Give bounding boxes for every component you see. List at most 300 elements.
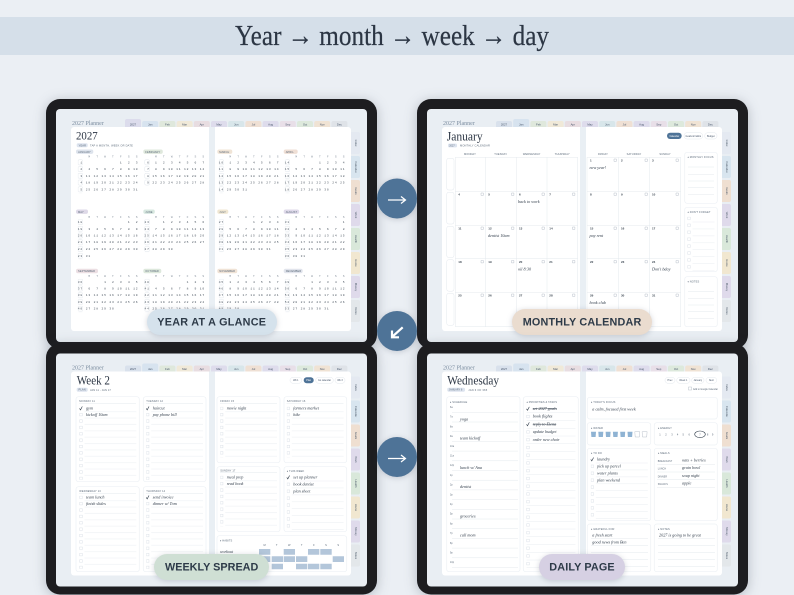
calendar grid: Don't bday — [651, 266, 671, 272]
month subtitle: MONTHLY CALENDAR — [460, 143, 490, 147]
today's focus — [587, 397, 717, 419]
day nav buttons: Next — [709, 379, 714, 382]
grateful for: good news from Ben — [592, 540, 626, 544]
month: October: 42 11 12 13 14 15 16 17 — [144, 294, 205, 297]
month: December: 53 27 28 29 30 31 — [285, 308, 330, 311]
energy scale: 9 — [712, 432, 714, 436]
panel: tablet year at a glance: Jul — [252, 122, 256, 126]
month: January: JANUARY — [78, 150, 91, 154]
day: Friday: movie night — [227, 406, 247, 410]
week nav buttons: Go calendar — [318, 379, 331, 382]
panel: tablet year at a glance: Goals — [354, 187, 358, 195]
month: July — [217, 210, 279, 253]
today's focus: ♦ TODAY'S FOCUS — [591, 400, 616, 404]
month: August: 36 30 31 — [285, 255, 306, 258]
schedule: 10a — [450, 446, 455, 448]
panel: tablet monthly calendar: Jun — [605, 122, 610, 126]
day nav buttons: Week 1 — [679, 379, 688, 382]
to do list: ♦ TO DO — [591, 451, 602, 455]
panel: tablet daily page: Home — [725, 504, 729, 512]
schedule: team kickoff — [460, 436, 481, 441]
day: Wednesday: WEDNESDAY 13 — [79, 489, 101, 493]
schedule: 7p — [450, 533, 453, 535]
schedule — [447, 397, 520, 572]
month subtitle: 2027 — [449, 145, 455, 147]
day: Saturday: farmers market — [293, 406, 320, 410]
day: Friday — [217, 397, 280, 463]
day: Monday: MONDAY 11 — [79, 399, 95, 403]
panel: tablet year at a glance: Nov — [320, 122, 325, 126]
month: September: M T W T F S S — [78, 275, 138, 278]
panel: tablet daily page: Goals — [725, 432, 729, 440]
this week list: book dentist — [293, 481, 314, 486]
month: December: 49 1 2 3 4 5 — [285, 281, 345, 284]
panel: tablet daily page: Jul — [623, 367, 627, 371]
view buttons — [667, 133, 717, 139]
sidebar: don't forget — [685, 207, 717, 272]
month: July: 28 5 6 7 8 9 10 11 — [219, 228, 279, 231]
meals: LUNCH — [658, 469, 666, 471]
panel: tablet monthly calendar: Money — [725, 283, 729, 292]
panel: tablet daily page: Dec — [708, 367, 713, 371]
sidebar: notes — [685, 277, 717, 327]
panel: tablet year at a glance: Work — [354, 212, 358, 219]
panel: tablet monthly calendar — [417, 99, 748, 349]
month: August: 34 16 17 18 19 20 21 22 — [285, 241, 345, 244]
weekday headers: TUESDAY — [494, 152, 507, 156]
panel: tablet daily page: Calendar — [725, 406, 729, 417]
energy scale: ♦ ENERGY — [658, 426, 672, 430]
schedule: lunch w/ Ana — [460, 465, 482, 470]
month: October: 41 4 5 6 7 8 9 10 — [144, 288, 205, 290]
panel: tablet weekly spread: Goals — [354, 432, 358, 440]
month: September: 37 6 7 8 9 10 11 12 — [78, 288, 138, 290]
calendar grid: 25 — [458, 294, 462, 298]
energy scale: 6 — [689, 432, 691, 436]
panel: tablet weekly spread: Work — [354, 456, 358, 463]
month: June: 24 7 8 9 10 11 12 13 — [144, 228, 205, 231]
panel: tablet weekly spread: 2027 Planner — [72, 366, 104, 372]
day: Tuesday — [143, 397, 206, 482]
panel: tablet year at a glance: Sep — [285, 122, 291, 126]
panel: tablet daily page: 2027 Planner — [443, 366, 475, 372]
panel: tablet weekly spread: Home — [354, 504, 358, 512]
panel: tablet weekly spread: Apr — [200, 367, 204, 371]
panel: tablet weekly spread: Jul — [252, 367, 256, 371]
day: Wednesday: team lunch — [86, 494, 104, 500]
panel: tablet daily page: 2027 — [501, 367, 508, 371]
calendar grid: 26 — [488, 294, 492, 298]
month: April: 16 12 13 14 15 16 17 18 — [285, 175, 345, 178]
sidebar: monthly focus — [685, 152, 717, 203]
meals: SNACKS — [658, 483, 668, 486]
month: November: NOVEMBER — [219, 269, 235, 273]
week nav buttons — [290, 377, 345, 383]
panel: tablet year at a glance: Index — [354, 140, 358, 147]
schedule: call mom — [460, 532, 475, 537]
google calendar link — [688, 387, 718, 391]
energy scale: 7 — [699, 432, 701, 436]
month: May: MAY — [78, 210, 84, 214]
calendar grid: 21 — [549, 260, 553, 264]
calendar grid: 2 — [621, 158, 623, 162]
panel: tablet monthly calendar: Sep — [656, 122, 662, 126]
month: January: 2 4 5 6 7 8 9 10 — [78, 168, 138, 171]
calendar grid: 22 — [590, 260, 594, 264]
panel: tablet monthly calendar: 2027 Planner — [443, 121, 475, 127]
panel: tablet weekly spread: Nov — [320, 367, 325, 371]
month: August — [284, 210, 345, 260]
calendar grid: 1 — [590, 158, 592, 162]
week subtitle — [77, 388, 111, 392]
day: Sunday: read book — [227, 481, 244, 486]
panel: tablet daily page: Work — [725, 456, 729, 463]
month: February: M T W T F S S — [144, 155, 205, 158]
schedule: groceries — [460, 513, 476, 518]
panel: tablet daily page: Mar — [553, 367, 558, 371]
meals: BREAKFAST — [658, 460, 673, 463]
water tracker — [587, 423, 651, 445]
day: Saturday — [284, 397, 347, 463]
label pill: daily page — [539, 554, 625, 580]
month: March: 14 29 30 31 — [219, 188, 248, 191]
weekday headers: FRIDAY — [598, 152, 608, 156]
month: June: M T W T F S S — [144, 216, 205, 219]
panel: tablet year at a glance: Feb — [165, 122, 170, 126]
month: September: 40 27 28 29 30 — [78, 308, 115, 311]
month: February — [143, 150, 205, 186]
month: December: 50 6 7 8 9 10 11 12 — [285, 288, 345, 290]
month: March: 12 15 16 17 18 19 20 21 — [219, 175, 279, 178]
schedule: 7a — [450, 417, 453, 419]
panel: tablet weekly spread: Mar — [182, 367, 187, 371]
month: September — [76, 269, 138, 313]
panel: tablet daily page: Index — [725, 384, 729, 392]
arrow: month to week — [377, 311, 417, 351]
meals: DINNER — [658, 476, 667, 478]
panel: tablet weekly spread: Jun — [234, 367, 239, 371]
panel: tablet daily page: May — [587, 367, 593, 371]
calendar grid: 3 — [652, 158, 654, 162]
panel: tablet monthly calendar: Notes — [725, 307, 729, 315]
priorities and tasks — [523, 397, 578, 572]
priorities and tasks: order new chair — [533, 437, 560, 442]
panel: tablet monthly calendar: Calendar — [725, 161, 729, 173]
month: September: 36 1 2 3 4 5 — [78, 281, 138, 284]
week nav buttons: Plan — [306, 379, 312, 382]
this week list: plan sheet — [292, 488, 311, 493]
panel: tablet year at a glance: Money — [354, 283, 358, 292]
panel: tablet monthly calendar: Jul — [623, 122, 627, 126]
panel: tablet daily page: Oct — [674, 367, 678, 371]
month: April: 17 19 20 21 22 23 24 25 — [285, 182, 345, 185]
month: November: 48 22 23 24 25 26 27 28 — [219, 301, 279, 304]
year subtitle: YEAR — [79, 143, 86, 147]
to do list: laundry — [597, 456, 610, 462]
panel: tablet daily page: Health — [725, 479, 729, 488]
schedule: 4p — [450, 504, 453, 506]
meals: grain bowl — [682, 465, 701, 470]
month: February: 7 8 9 10 11 12 13 14 — [144, 168, 205, 171]
heading: January: January — [447, 128, 483, 143]
habits tracker: T — [301, 543, 303, 547]
calendar grid: 19 — [488, 260, 492, 264]
calendar grid: 15 — [590, 226, 594, 230]
month: March: 10 1 2 3 4 5 6 7 — [219, 161, 279, 164]
month: March: MARCH — [219, 150, 229, 154]
calendar grid: dentist 10am — [488, 233, 510, 238]
calendar grid: 11 — [458, 226, 462, 230]
panel: tablet weekly spread: 2027 — [130, 367, 137, 371]
to do list — [587, 448, 651, 521]
notes: 2027 is going to be great — [659, 532, 702, 538]
energy scale: 1 — [659, 432, 661, 436]
panel: tablet year at a glance: Calendar — [354, 161, 358, 173]
day: Thursday: send invoice — [153, 494, 174, 500]
month: April: 15 5 6 7 8 9 10 11 — [285, 168, 345, 171]
day: Sunday — [217, 467, 280, 532]
year subtitle: TAP A MONTH, WEEK OR DATE — [90, 143, 133, 147]
month: August: M T W T F S S — [285, 216, 345, 219]
month: May: 22 24 25 26 27 28 29 30 — [78, 248, 138, 251]
panel: tablet monthly calendar: Feb — [536, 122, 541, 126]
month: May: 23 31 — [78, 255, 91, 258]
day: Friday: FRIDAY 15 — [220, 399, 235, 403]
calendar grid: 27 — [519, 294, 523, 298]
title banner: Year → month → week → day — [235, 20, 549, 52]
week nav buttons: Wk 3 — [337, 379, 343, 382]
month: April: 14 1 2 3 4 — [285, 161, 345, 164]
google calendar link: Add to Google Calendar — [693, 388, 718, 391]
month: October: 40 1 2 3 — [144, 281, 205, 284]
priorities and tasks: update budget — [533, 429, 557, 434]
day: Saturday: hike — [293, 412, 300, 417]
month: December: M T W T F S S — [285, 275, 345, 278]
habits tracker: F — [313, 543, 315, 547]
month: November — [217, 269, 279, 313]
month: March: M T W T F S S — [219, 155, 279, 158]
panel: tablet weekly spread: Jan — [148, 367, 153, 371]
panel: tablet year at a glance: Oct — [303, 122, 307, 126]
panel: tablet year at a glance — [46, 99, 377, 349]
month: December: DECEMBER — [286, 269, 301, 273]
calendar grid: 7 — [549, 192, 551, 196]
calendar grid: 30 — [621, 294, 625, 298]
month: January: 4 18 19 20 21 22 23 24 — [78, 182, 138, 185]
notes — [654, 524, 717, 572]
meals — [654, 448, 717, 521]
priorities and tasks: set 2027 goals — [533, 406, 557, 411]
panel: tablet year at a glance: Apr — [200, 122, 204, 126]
arrow: week to day — [377, 437, 417, 477]
calendar grid: 20 — [519, 260, 523, 264]
month: May: 21 17 18 19 20 21 22 23 — [78, 241, 138, 244]
calendar grid: book club — [590, 300, 606, 305]
panel: tablet daily page: Apr — [571, 367, 575, 371]
month: February: FEBRUARY — [145, 150, 160, 154]
day: Thursday: THURSDAY 14 — [146, 489, 166, 493]
month: October — [143, 269, 205, 313]
energy scale: 5 — [683, 432, 685, 436]
day: Tuesday: pay phone bill — [152, 412, 177, 417]
month: November: 46 8 9 10 11 12 13 14 — [219, 288, 279, 290]
calendar grid: 12 — [488, 226, 492, 230]
calendar grid: 13 — [519, 226, 523, 230]
calendar grid: 5 — [488, 192, 490, 196]
day subtitle: JAN 6 OF 365 — [468, 388, 488, 392]
week subtitle: PLAN — [78, 388, 86, 392]
to do list: plan weekend — [596, 477, 621, 482]
sidebar: don't forget: ♦ DON'T FORGET — [688, 210, 711, 214]
month: June: JUNE — [145, 210, 153, 214]
panel: tablet daily page: Notes — [725, 552, 729, 560]
month: October: 43 18 19 20 21 22 23 24 — [144, 301, 205, 304]
notes: ♦ NOTES — [658, 527, 670, 531]
panel: tablet daily page: Money — [725, 527, 729, 536]
schedule: 5p — [450, 514, 453, 516]
label pill: year at a glance — [147, 309, 277, 335]
day: Monday: gym — [86, 406, 93, 410]
panel: tablet monthly calendar: Jan — [519, 122, 524, 126]
month: February: 9 22 23 24 25 26 27 28 — [144, 182, 205, 185]
panel: tablet daily page — [417, 344, 748, 594]
panel: tablet daily page: Aug — [639, 367, 645, 371]
panel: tablet year at a glance: Aug — [268, 122, 274, 126]
month: August: AUGUST — [286, 210, 298, 214]
panel: tablet year at a glance: Health — [354, 235, 358, 243]
calendar grid: new year! — [590, 165, 607, 170]
panel: tablet daily page: Nov — [691, 367, 696, 371]
schedule: 8a — [450, 426, 453, 428]
panel: tablet monthly calendar: Oct — [674, 122, 678, 126]
schedule: ♦ SCHEDULE — [450, 400, 468, 404]
month: August: 33 9 10 11 12 13 14 15 — [285, 234, 345, 238]
calendar grid: 9 — [621, 192, 623, 196]
panel: tablet monthly calendar: Health — [725, 235, 729, 243]
to do list: pick up parcel — [596, 463, 622, 468]
label pill: monthly calendar — [512, 309, 652, 335]
month: January: M T W T F S S — [78, 155, 138, 158]
month: December: 52 20 21 22 23 24 25 26 — [285, 301, 345, 304]
year subtitle — [77, 143, 133, 147]
heading: 2027: 2027 — [76, 128, 98, 142]
month: June: 25 14 15 16 17 18 19 20 — [144, 234, 205, 238]
this week list — [284, 467, 347, 532]
schedule: 3p — [450, 494, 453, 496]
priorities and tasks: ♦ PRIORITIES & TASKS — [526, 400, 557, 404]
panel: tablet weekly spread: Aug — [268, 367, 274, 371]
heading: Week 2: Week 2 — [77, 372, 110, 387]
month: May: 19 3 4 5 6 7 8 9 — [78, 228, 138, 231]
panel: tablet monthly calendar: Mar — [553, 122, 558, 126]
meals: soup night — [682, 473, 700, 478]
panel: tablet weekly spread: Health — [354, 479, 358, 488]
sidebar: notes: ♦ NOTES — [688, 280, 699, 284]
day: Wednesday — [76, 487, 139, 572]
panel: tablet monthly calendar: May — [587, 122, 593, 126]
panel: tablet weekly spread: Oct — [303, 367, 307, 371]
meals: ♦ MEALS — [658, 451, 670, 455]
panel: tablet year at a glance: May — [216, 122, 222, 126]
month: February: 6 1 2 3 4 5 6 7 — [144, 161, 205, 164]
calendar grid: 16 — [621, 226, 625, 230]
month: March: 11 8 9 10 11 12 13 14 — [219, 168, 279, 171]
day subtitle: JANUARY 6 — [449, 389, 463, 392]
month: July: 31 26 27 28 29 30 31 — [219, 248, 271, 251]
month: June: 23 1 2 3 4 5 6 — [144, 221, 205, 224]
day nav buttons: January — [694, 379, 703, 382]
to do list: water plants — [597, 470, 618, 475]
week subtitle: JAN 11 - JAN 17 — [90, 388, 111, 392]
month: January — [76, 150, 138, 193]
schedule: 10p — [450, 562, 455, 564]
calendar grid: 17 — [652, 226, 656, 230]
habits tracker: workout — [220, 549, 234, 554]
calendar grid: 18 — [458, 260, 462, 264]
panel: tablet weekly spread: Notes — [354, 552, 358, 560]
day: Thursday: dinner w/ Tom — [153, 501, 177, 506]
month: January: 1 1 2 3 — [78, 161, 138, 164]
day: Tuesday: TUESDAY 12 — [146, 399, 164, 403]
day subtitle — [447, 388, 488, 392]
calendar grid: pay rent — [588, 233, 604, 238]
grateful for: ♦ GRATEFUL FOR — [591, 527, 614, 531]
weekday headers: MONDAY — [464, 152, 476, 156]
calendar grid: 8 — [590, 192, 592, 196]
panel: tablet monthly calendar: Dec — [708, 122, 713, 126]
month: September: 39 20 21 22 23 24 25 26 — [78, 301, 138, 304]
energy scale: 3 — [671, 432, 673, 436]
calendar grid: back to work — [518, 199, 540, 204]
panel: tablet year at a glance: 2027 — [130, 122, 137, 126]
month: November: 45 1 2 3 4 5 6 7 — [219, 281, 279, 284]
day: Sunday: meal prep — [227, 474, 243, 480]
month: August: 35 23 24 25 26 27 28 29 — [285, 248, 345, 251]
schedule: 11a — [450, 456, 455, 458]
month: October: 44 25 26 27 28 29 30 31 — [144, 308, 205, 311]
priorities and tasks: book flights — [533, 414, 553, 419]
month: May: 20 10 11 12 13 14 15 16 — [78, 234, 138, 238]
month: February: 8 15 16 17 18 19 20 21 — [144, 175, 205, 178]
panel: tablet year at a glance: Jun — [234, 122, 239, 126]
schedule: 12p — [450, 465, 455, 467]
habits tracker: T — [276, 543, 278, 547]
schedule: 9p — [450, 552, 453, 554]
month: January: 3 11 12 13 14 15 16 17 — [78, 175, 138, 178]
panel: tablet daily page: Jun — [605, 367, 610, 371]
schedule: 6a — [450, 407, 453, 409]
meals: oats + berries — [682, 458, 706, 462]
month: April: APRIL — [286, 150, 294, 154]
month: April: M T W T F S S — [285, 155, 345, 158]
schedule: 9a — [450, 436, 453, 438]
panel: tablet monthly calendar: Apr — [571, 122, 575, 126]
schedule: yoga — [459, 417, 468, 422]
month: July: 29 12 13 14 15 16 17 18 — [219, 234, 279, 238]
schedule: 8p — [450, 543, 453, 545]
panel: tablet daily page: Feb — [536, 367, 541, 371]
this week list: set up planner — [293, 474, 318, 480]
month: October: OCTOBER — [145, 269, 159, 273]
month: March — [217, 150, 279, 193]
calendar grid: 29 — [590, 294, 594, 298]
day: Sunday: SUNDAY 17 — [220, 468, 236, 472]
label pill: daily page: DAILY PAGE — [549, 562, 615, 574]
month: July: M T W T F S S — [219, 216, 279, 219]
panel: tablet year at a glance: Mar — [182, 122, 187, 126]
priorities and tasks: reply to Elena — [533, 422, 556, 426]
month: November: M T W T F S S — [219, 275, 279, 278]
